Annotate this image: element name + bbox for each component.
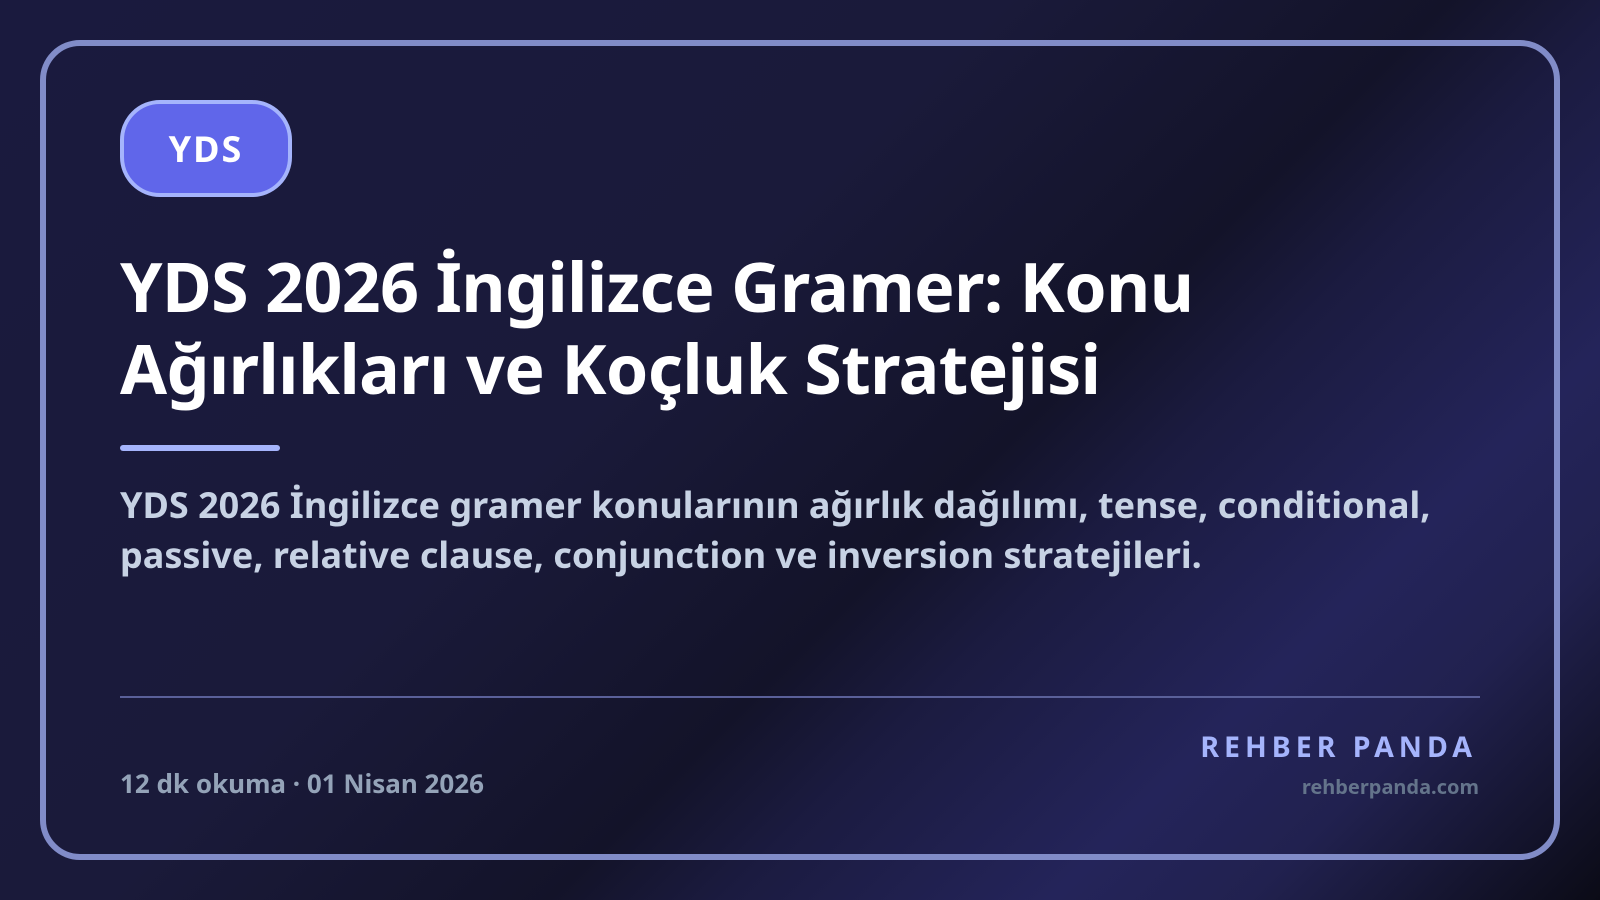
reading time and date: 12 dk okuma · 01 Nisan 2026	[120, 765, 484, 801]
brand block	[1200, 728, 1479, 800]
subtitle: passive, relative clause, conjunction ve inversion stratejileri.	[120, 530, 1202, 579]
subtitle: YDS 2026 İngilizce gramer konularının ağırlık dağılımı, tense, conditional,	[120, 480, 1431, 529]
website: rehberpanda.com	[1302, 773, 1479, 800]
brand name: REHBER PANDA	[1200, 728, 1477, 766]
badge: YDS: YDS	[169, 124, 243, 173]
title: YDS 2026 İngilizce Gramer: Konu	[120, 239, 1193, 332]
footer divider	[120, 696, 1480, 698]
title	[120, 239, 1193, 414]
accent bar	[120, 445, 280, 451]
title: Ağırlıkları ve Koçluk Stratejisi	[120, 321, 1100, 414]
badge: YDS	[120, 100, 292, 197]
subtitle	[120, 480, 1431, 579]
